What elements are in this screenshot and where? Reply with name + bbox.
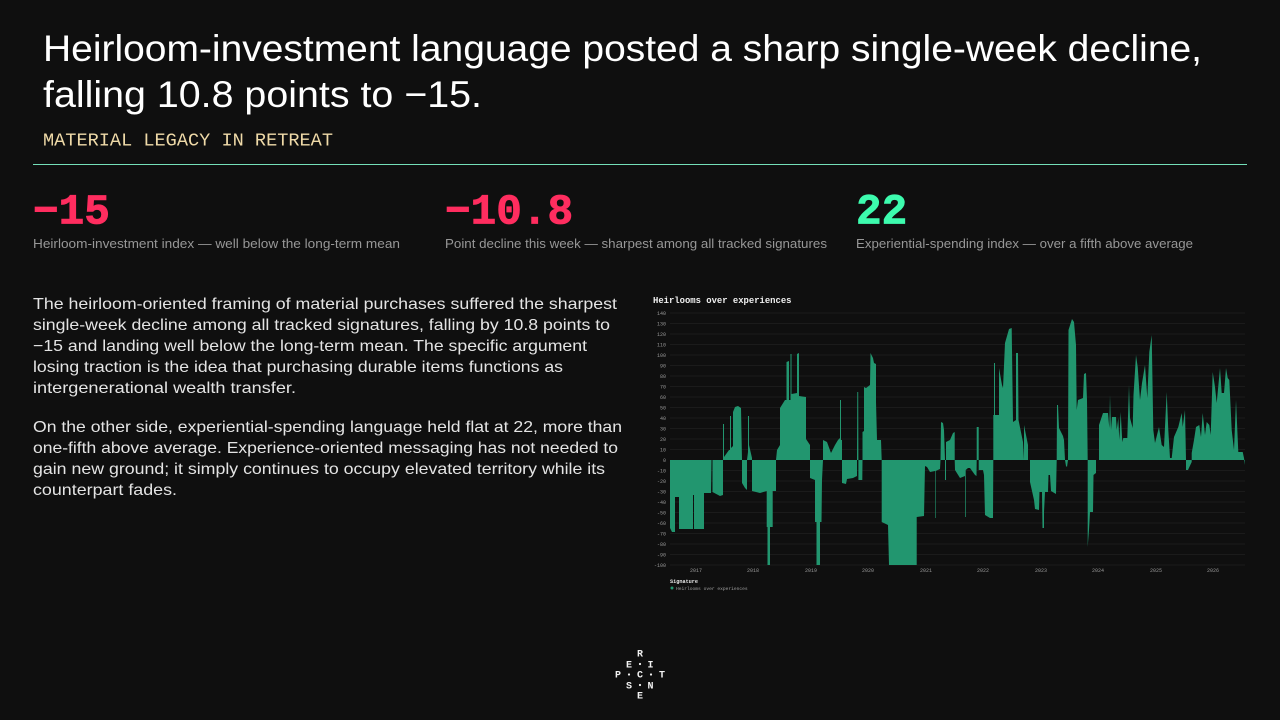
stat: heirloom-investment index: −15 [33,188,110,236]
y axis labels: 120 [657,332,666,338]
text block: experiential paragraph: one-fifth above average. Experience-oriented messaging has not needed to [33,440,618,457]
y axis labels: 20 [660,437,666,443]
text block: heirloom paragraph: −15 and landing well below the long-term mean. The specific argument [33,338,588,355]
stat: experiential-spending index [856,188,1193,251]
x axis labels: 2026 [1207,568,1219,574]
y axis labels: 10 [660,448,666,454]
y axis labels: 40 [660,416,666,422]
stat: heirloom-investment index [33,188,400,251]
y axis labels: -100 [654,563,666,569]
area series [670,319,1245,565]
text block: experiential paragraph: counterpart fades. [33,482,177,499]
stat: experiential-spending index: Experiential-spending index — over a fifth above average [856,237,1193,251]
text block: experiential paragraph [33,419,622,499]
y axis labels: -50 [657,510,666,516]
x axis labels: 2024 [1092,568,1104,574]
stat: point decline: Point decline this week — sharpest among all tracked signatures [445,237,827,251]
stat: point decline: −10.8 [445,188,573,236]
y axis labels: 130 [657,322,666,328]
logo: precision mark [615,650,665,702]
stat: point decline [445,188,827,251]
x axis labels: 2025 [1150,568,1162,574]
subtitle: MATERIAL LEGACY IN RETREAT [43,130,333,152]
y axis labels: 30 [660,426,666,432]
y axis labels: 100 [657,353,666,359]
logo: precision mark: S [626,682,632,692]
text block: heirloom paragraph: intergenerational wealth transfer. [33,380,296,397]
logo: precision mark: E [626,660,632,672]
title: falling 10.8 points to −15. [43,74,482,115]
logo: precision mark: N [647,682,654,692]
text block: heirloom paragraph: single-week decline among all tracked signatures, falling by 10.8 points to [33,317,610,334]
x axis labels: 2022 [977,568,989,574]
legend: Heirlooms over experiences [676,586,748,592]
logo: precision mark: C [637,670,643,682]
logo: precision mark: T [659,670,665,682]
y axis labels: -40 [657,500,666,506]
text block: heirloom paragraph: The heirloom-oriented framing of material purchases suffered the sharpest [33,296,618,313]
y axis labels: -30 [657,490,666,496]
x axis labels: 2021 [920,568,932,574]
y axis labels: -10 [657,468,666,474]
y axis labels: 80 [660,374,666,380]
legend: Signature [670,579,698,585]
x axis labels [690,568,1219,574]
y axis labels: 140 [657,311,666,317]
y axis labels: -60 [657,521,666,527]
title [43,28,1202,115]
y axis labels [654,311,666,569]
legend [670,579,748,592]
logo: precision mark: I [647,660,654,672]
x axis labels: 2020 [862,568,874,574]
y axis labels: -20 [657,479,666,485]
y axis labels: 50 [660,406,666,412]
y axis labels: 90 [660,364,666,370]
logo: precision mark: E [637,692,643,702]
stat: experiential-spending index: 22 [856,188,907,236]
text block: experiential paragraph: gain new ground; it simply continues to occupy elevated territory while its [33,461,605,478]
x axis labels: 2018 [747,568,759,574]
text block: heirloom paragraph [33,296,618,397]
text block: heirloom paragraph: losing traction is the idea that purchasing durable items functions as [33,359,563,376]
text block: experiential paragraph: On the other side, experiential-spending language held flat at 22, more than [33,419,622,436]
y axis labels: -80 [657,542,666,548]
logo: precision mark: P [615,670,621,682]
y axis labels: 60 [660,395,666,401]
y axis labels: 70 [660,384,666,390]
stat: heirloom-investment index: Heirloom-investment index — well below the long-term mean [33,237,400,251]
x axis labels: 2017 [690,568,702,574]
y axis labels: 110 [657,342,666,348]
logo: precision mark: R [637,650,643,660]
x axis labels: 2019 [805,568,817,574]
y axis labels: -90 [657,552,666,558]
chart: heirlooms over experiences [653,296,1245,592]
y axis labels: 0 [663,458,666,464]
x axis labels: 2023 [1035,568,1047,574]
chart title: Heirlooms over experiences [653,296,791,306]
y axis labels: -70 [657,532,666,538]
title: Heirloom-investment language posted a sharp single-week decline, [43,28,1202,69]
